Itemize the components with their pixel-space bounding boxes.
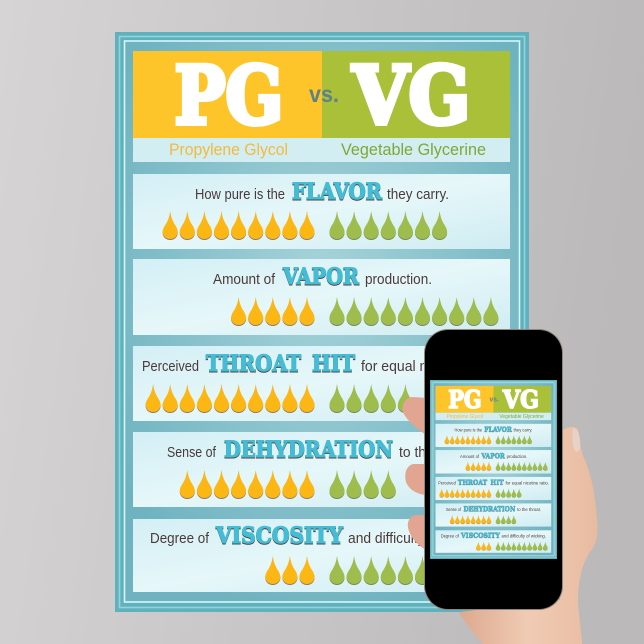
heading: flavor: FLAVOR bbox=[292, 179, 383, 205]
phone body bbox=[424, 329, 563, 610]
heading: throat hit: HIT bbox=[312, 351, 356, 377]
panel: viscosity bbox=[133, 519, 510, 592]
screen panel: viscosity: Degree of bbox=[441, 534, 460, 539]
heading: throat hit: Perceived bbox=[142, 359, 199, 375]
heading: dehydration: to the throat. bbox=[399, 445, 477, 461]
heading: dehydration: Sense of bbox=[167, 445, 217, 461]
screen panel: dehydration bbox=[436, 503, 551, 527]
heading: dehydration: DEHYDRATION bbox=[224, 437, 393, 463]
screen header: PG bbox=[448, 385, 482, 414]
screen panel: viscosity: and difficulty of wicking. bbox=[501, 534, 546, 539]
screen panel: dehydration: Sense of bbox=[446, 507, 462, 512]
panel: vapor bbox=[133, 259, 510, 335]
heading: vapor: production. bbox=[365, 272, 432, 288]
screen subtitles: Vegetable Glycerine bbox=[499, 414, 544, 420]
phone screen: poster copy bbox=[430, 380, 557, 559]
heading: viscosity: VISCOSITY bbox=[215, 523, 343, 549]
screen subtitles bbox=[436, 413, 551, 420]
heading: flavor: they carry. bbox=[387, 187, 449, 203]
hand palm bbox=[459, 427, 598, 644]
panel: dehydration bbox=[133, 432, 510, 507]
screen panel: throat hit: Perceived bbox=[438, 481, 456, 486]
fingernail bbox=[572, 428, 580, 452]
screen header: vs. bbox=[490, 397, 499, 404]
screen frame bbox=[430, 380, 557, 559]
panel: throat hit bbox=[133, 346, 510, 421]
screen header: VG bbox=[502, 385, 539, 414]
heading: viscosity: and difficulty of wicking. bbox=[348, 531, 493, 547]
header: PG vs VG bbox=[133, 48, 510, 142]
drops: dehydration 8 PG, 4 VG bbox=[180, 470, 396, 499]
finger: top bbox=[402, 397, 428, 436]
screen panel: viscosity bbox=[436, 530, 551, 553]
screen panel: throat hit: THROAT bbox=[458, 479, 487, 487]
title: PG: PG bbox=[174, 48, 284, 142]
screen panel: viscosity: VISCOSITY bbox=[460, 532, 500, 540]
heading: viscosity: Degree of bbox=[150, 531, 210, 547]
drops: viscosity 3 PG, 10 VG bbox=[265, 556, 498, 585]
panel: poster bbox=[115, 32, 529, 612]
heading: flavor: How pure is the bbox=[195, 187, 285, 203]
drops: vapor 5 PG, 10 VG bbox=[231, 297, 498, 326]
drops: flavor 9 PG, 7 VG bbox=[163, 211, 447, 240]
screen panel: vapor: VAPOR bbox=[481, 452, 505, 460]
phone bbox=[424, 329, 563, 610]
subtitle band bbox=[133, 138, 510, 162]
screen panel: vapor: production. bbox=[507, 454, 527, 459]
title: vs.: vs. bbox=[309, 81, 339, 107]
screen panel: flavor: How pure is the bbox=[455, 428, 483, 433]
screen subtitles: Propylene Glycol bbox=[447, 414, 483, 420]
screen panel: dehydration: DEHYDRATION bbox=[463, 505, 515, 513]
heading: vapor: Amount of bbox=[213, 272, 276, 288]
panel: flavor bbox=[133, 174, 510, 249]
finger: middle bbox=[405, 464, 428, 495]
screen panel: dehydration: to the throat. bbox=[517, 507, 541, 512]
screen panel: vapor: Amount of bbox=[460, 454, 480, 459]
subtitle: Propylene Glycol: Propylene Glycol bbox=[169, 141, 288, 159]
screen panel: flavor: FLAVOR bbox=[484, 426, 512, 434]
screen panel: flavor: they carry. bbox=[513, 428, 532, 433]
finger: lower bbox=[408, 515, 428, 551]
subtitle: Vegetable Glycerine: Vegetable Glycerine bbox=[341, 141, 486, 159]
title: VG: VG bbox=[352, 48, 470, 142]
drops: throat hit 10 PG, 5 VG bbox=[146, 384, 413, 413]
screen panel: throat hit: for equal nicotine ratio. bbox=[505, 481, 549, 486]
screen panel: vapor bbox=[436, 450, 551, 474]
screen header bbox=[436, 385, 551, 414]
poster frame bbox=[115, 32, 529, 612]
screen panel: throat hit: HIT bbox=[490, 479, 504, 487]
heading: vapor: VAPOR bbox=[282, 264, 360, 290]
heading: throat hit: THROAT bbox=[206, 351, 302, 377]
heading: throat hit: for equal nicotine ratio. bbox=[361, 359, 503, 375]
screen panel: flavor bbox=[436, 424, 551, 447]
screen panel: throat hit bbox=[436, 477, 551, 500]
